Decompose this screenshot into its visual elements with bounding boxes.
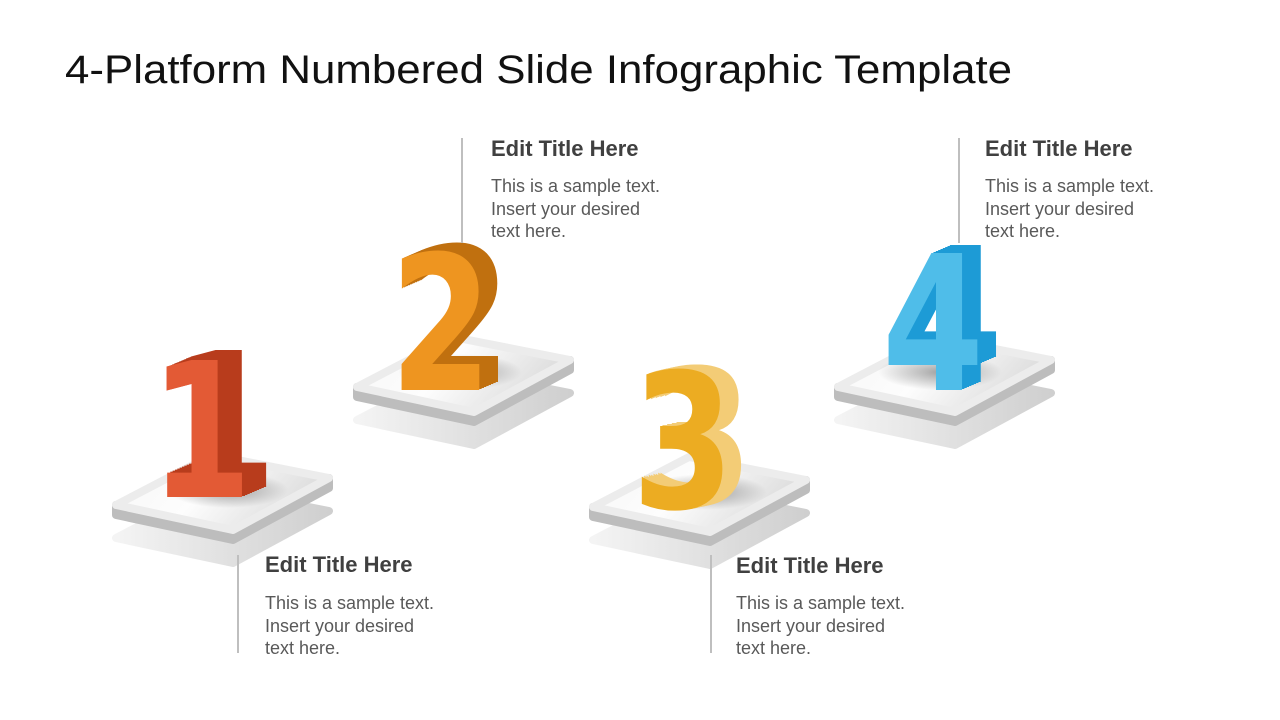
number 3: 3 [644,331,746,550]
text block 4 [959,136,1154,243]
number 1: 1 [160,319,262,538]
number 2: 2 [409,208,511,427]
number 4: 4 [891,212,993,431]
number 1: 1 [155,321,257,540]
number 2: 2 [390,216,492,435]
text block 3: Insert your desired [736,616,885,636]
number 3: 3 [648,330,750,549]
text block 2 [462,136,660,243]
text block 4: This is a sample text. [985,176,1154,196]
text block 3: Edit Title Here [736,553,884,578]
number 1: 1 [153,322,255,541]
number 1: 1 [174,313,276,532]
number 3: 3 [651,330,753,549]
number 3: 3 [639,332,741,551]
text block 2: Edit Title Here [491,136,639,161]
number 2: 2 [392,215,494,434]
text block 4: Edit Title Here [985,136,1133,161]
number 1: 1 [150,323,252,542]
number 2: 2 [404,210,506,429]
text block 3: text here. [736,638,811,658]
number 3: 3 [646,331,748,550]
number 1: 1 [165,317,267,536]
number 3: 3 [632,334,734,553]
number 3: 3 [634,333,736,552]
number 3: 3 [641,332,743,551]
number 2: 2 [395,214,497,433]
number 1: 1 [169,315,272,534]
platform 3 [593,330,806,565]
number 4: 4 [896,210,998,429]
number 2: 2 [397,213,499,432]
number 1: 1 [158,320,260,539]
number 4: 4 [901,208,1003,427]
number 2: 2 [406,209,508,428]
platform 2 [357,208,570,445]
text block 1: Insert your desired [265,616,414,636]
platform 1 [116,313,329,563]
title: 4-Platform Numbered Slide Infographic Template [65,48,1012,92]
number 2: 2 [399,212,501,431]
text block 1: This is a sample text. [265,593,434,613]
number 4: 4 [894,211,996,430]
number 1: 1 [172,314,274,533]
text block 2: text here. [491,221,566,241]
text block 2: Insert your desired [491,199,640,219]
number 4: 4 [882,216,984,435]
number 3: 3 [637,333,739,552]
text block 3 [711,553,905,658]
number 1: 1 [162,318,265,537]
number 4: 4 [884,215,986,434]
text block 1: text here. [265,638,340,658]
text block 3: This is a sample text. [736,593,905,613]
number 1: 1 [167,316,269,535]
text block 1: Edit Title Here [265,552,413,577]
number 2: 2 [402,211,504,430]
number 4: 4 [889,213,991,432]
text block 4: Insert your desired [985,199,1134,219]
platform 4 [838,208,1051,445]
text block 2: This is a sample text. [491,176,660,196]
text block 4: text here. [985,221,1060,241]
number 4: 4 [887,214,989,433]
text block 1 [238,552,434,658]
number 4: 4 [898,209,1000,428]
